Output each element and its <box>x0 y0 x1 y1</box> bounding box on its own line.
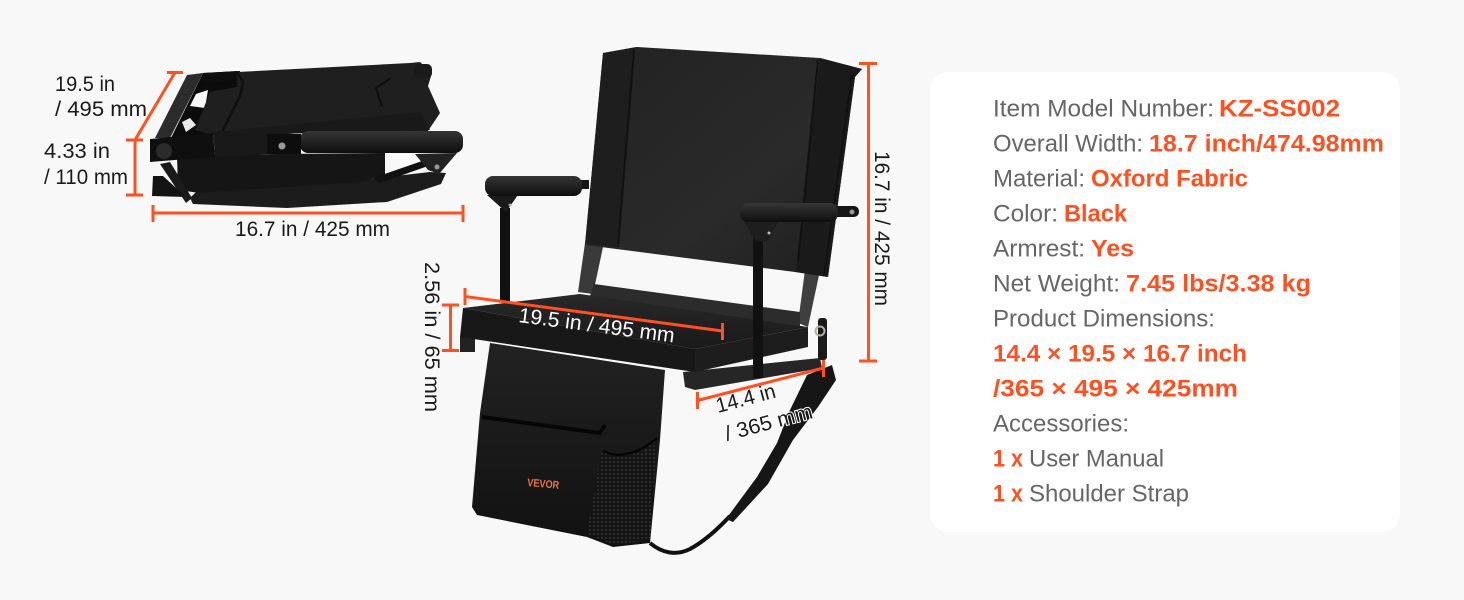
open chair dimensions <box>420 64 893 446</box>
folded upper rail <box>203 71 237 83</box>
right back strut <box>798 270 819 327</box>
hinge hardware <box>816 318 827 360</box>
folded depth line <box>135 72 183 140</box>
folded latch <box>160 162 192 203</box>
spec: material: Oxford Fabric <box>1091 166 1248 192</box>
cushion thickness line <box>442 305 459 350</box>
folded dimensions <box>44 72 463 241</box>
folded knob <box>156 143 172 159</box>
seat depth line <box>698 360 824 409</box>
left armrest <box>485 176 589 302</box>
spec: armrest: Yes <box>1091 236 1134 262</box>
folded lower cushion <box>177 153 385 193</box>
folded width line <box>153 205 463 222</box>
spec: user manual: 1 x <box>993 446 1023 472</box>
spec: overall width: 18.7 inch/474.98mm <box>1149 130 1384 158</box>
seat width label: 19.5 in / 495 mm <box>517 304 676 347</box>
folded strap <box>190 172 446 208</box>
back height line <box>859 64 877 361</box>
storage bag <box>472 343 665 547</box>
card background <box>930 72 1400 532</box>
spec: color <box>993 200 1127 228</box>
spec: color: Black <box>1064 200 1127 228</box>
spec: model number: Item Model Number: <box>993 96 1214 122</box>
back height label: 16.7 in / 425 mm <box>870 151 893 306</box>
spec: net weight: 7.45 lbs/3.38 kg <box>1126 270 1311 298</box>
spec: shoulder strap: Shoulder Strap <box>1029 480 1189 508</box>
folded triangle screw <box>434 164 440 170</box>
cushion thickness label: 2.56 in / 65 mm <box>420 262 443 412</box>
spec: dimensions millimetres: /365 × 495 × 425mm <box>993 376 1238 402</box>
spec: dimensions inches: 14.4 × 19.5 × 16.7 inch <box>993 340 1247 368</box>
spec: overall width: Overall Width: <box>993 130 1143 158</box>
spec: shoulder strap: 1 x <box>993 480 1023 508</box>
shoulder strap <box>650 365 836 553</box>
rear seat bar <box>590 284 800 326</box>
folded strut <box>373 160 428 183</box>
brand logo: VEVOR <box>527 477 560 492</box>
folded frame backing <box>170 71 240 140</box>
folded screw <box>278 142 286 150</box>
folded fabric seam <box>222 72 391 132</box>
spec: model number <box>993 96 1340 122</box>
spec: armrest <box>993 236 1134 262</box>
right armrest <box>740 203 859 378</box>
folded width label: 16.7 in / 425 mm <box>235 218 390 241</box>
folded frame bars <box>155 73 203 138</box>
spec: model number: KZ-SS002 <box>1219 96 1340 122</box>
spec: accessories heading: Accessories: <box>993 410 1129 438</box>
folded frame gap lower <box>182 118 196 132</box>
seat depth label: 14.4 in <box>713 380 778 418</box>
folded height label: / 110 mm <box>44 166 128 189</box>
mesh pocket <box>587 440 657 545</box>
folded fabric back <box>195 62 440 135</box>
spec: user manual: User Manual <box>1029 446 1164 472</box>
folded rear knob <box>414 64 432 78</box>
folded height line <box>126 140 143 195</box>
spec: material: Material: <box>993 166 1085 192</box>
spec: net weight <box>993 270 1311 298</box>
seat depth label line two: / 365 mm <box>722 400 815 446</box>
folded hinge block <box>150 133 215 162</box>
folded depth label: 19.5 in <box>55 73 115 96</box>
spec: armrest: Armrest: <box>993 236 1085 262</box>
folded depth label: / 495 mm <box>55 98 147 121</box>
mesh pocket rim <box>603 438 657 455</box>
specifications card <box>930 72 1400 532</box>
folded frame gap top <box>190 90 208 108</box>
open chair photo <box>460 47 862 553</box>
spec: net weight: Net Weight: <box>993 270 1120 298</box>
folded arm sleeve <box>213 112 430 157</box>
folded chair photo <box>150 62 463 208</box>
seat base frame <box>683 358 822 390</box>
spec: overall width <box>993 130 1384 158</box>
folded armrest <box>300 131 463 153</box>
spec: product dimensions heading: Product Dimensions: <box>993 306 1215 332</box>
spec: color: Color: <box>993 200 1058 228</box>
seat width line <box>465 288 722 340</box>
folded base <box>152 176 186 197</box>
folded triangle bracket <box>415 153 457 174</box>
seat cushion <box>460 294 808 372</box>
spec: material <box>993 166 1248 192</box>
backrest <box>585 47 862 277</box>
bag zipper <box>482 417 605 433</box>
folded arm bracket <box>267 134 301 154</box>
left back strut <box>578 243 603 294</box>
folded height label: 4.33 in <box>44 140 110 163</box>
left seat foot <box>460 337 475 352</box>
